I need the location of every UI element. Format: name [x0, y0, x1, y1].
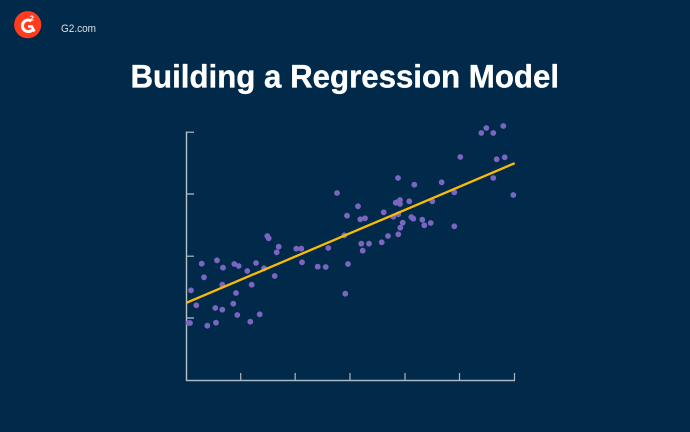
chart: scatter plot with regression line: [185, 123, 516, 381]
title: Building a Regression Model: [130, 58, 559, 94]
brand label: G2.com: G2.com: [61, 23, 96, 35]
icon: G2 logo: [14, 11, 41, 38]
scatter points: [185, 123, 516, 329]
y axis: [186, 132, 194, 381]
x axis: [186, 373, 515, 380]
icon: G2 logo: 2: [30, 16, 34, 22]
regression line: [187, 163, 515, 303]
